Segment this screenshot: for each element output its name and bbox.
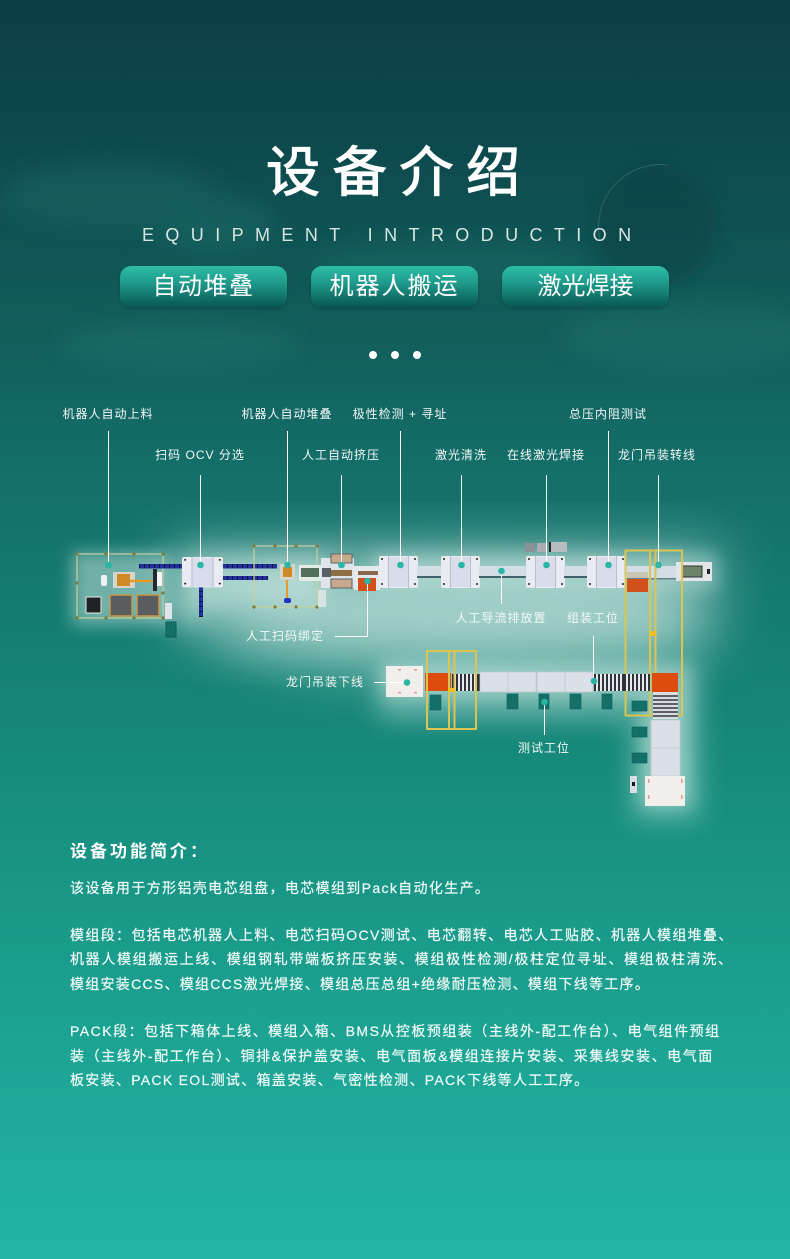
callout: total voltage resistance test: 总压内阻测试 (569, 406, 647, 421)
laser cleaning station (441, 556, 480, 588)
lower line roller (452, 674, 480, 691)
vertical white segments (651, 720, 680, 776)
module section paragraph: 模组安装CCS、模组CCS激光焊接、模组总压总组+绝缘耐压检测、模组下线等工序。 (70, 976, 650, 992)
module section paragraph (70, 927, 734, 992)
button: robot transfer: 机器人搬运 (330, 273, 460, 300)
polarity check station (379, 556, 418, 588)
callout: online laser welding (507, 447, 585, 568)
callout: polarity check and addressing: 极性检测 + 寻址 (353, 406, 447, 421)
button: automatic stacking: 自动堆叠 (152, 273, 254, 300)
callout: test station: 测试工位 (518, 740, 570, 755)
vertical roller (653, 692, 678, 719)
callout: total voltage resistance test (569, 406, 647, 568)
laser welder units (525, 542, 567, 552)
online laser welding station (526, 556, 565, 588)
callout: manual scan binding (246, 578, 371, 643)
extrusion station (299, 554, 354, 588)
lower line white block (386, 666, 423, 697)
callout: manual busbar placing: 人工导流排放置 (455, 610, 547, 625)
small console (630, 776, 637, 793)
blue conveyors (139, 564, 277, 617)
lower line orange carrier (425, 673, 451, 691)
button: robot transfer (311, 266, 478, 308)
module section paragraph: 模组段：包括电芯机器人上料、电芯扫码OCV测试、电芯翻转、电芯人工贴胶、机器人模组堆叠、 (70, 927, 734, 943)
total voltage test station (587, 556, 626, 588)
callout: laser cleaning (435, 448, 487, 568)
connecting conveyor (564, 566, 588, 578)
callout: assembly station (567, 610, 619, 684)
cell feeding robot cell (75, 552, 176, 637)
callout: scan OCV sorting (155, 448, 245, 568)
callout: gantry transfer: 龙门吊装转线 (618, 447, 696, 462)
stacking robot cell (252, 544, 326, 609)
pack section paragraph: 板安装、PACK EOL测试、箱盖安装、气密性检测、PACK下线等人工工序。 (70, 1072, 589, 1088)
callout: polarity check and addressing (353, 406, 447, 568)
busbar placing conveyor (479, 566, 526, 578)
callout: test station (518, 699, 570, 755)
button: laser welding (502, 266, 669, 308)
callout: online laser welding: 在线激光焊接 (507, 447, 585, 462)
pack section paragraph: PACK段：包括下箱体上线、模组入箱、BMS从控板预组装（主线外-配工作台）、电气组件预组 (70, 1023, 721, 1039)
pagination dots (369, 351, 421, 359)
button: automatic stacking (120, 266, 287, 308)
pack section paragraph (70, 1023, 721, 1088)
assembly white segments (480, 672, 593, 692)
callout: gantry transfer (618, 447, 696, 568)
module section paragraph: 机器人模组搬运上线、模组钢轧带端板挤压安装、模组极性检测/极柱定位寻址、模组极柱清洗、 (70, 951, 734, 967)
button: laser welding: 激光焊接 (538, 273, 634, 300)
upper conveyor and end unit (626, 562, 712, 592)
callout: gantry unloading: 龙门吊装下线 (286, 674, 364, 689)
callout: gantry unloading (286, 674, 410, 689)
intro paragraph: 该设备用于方形铝壳电芯组盘，电芯模组到Pack自动化生产。 (70, 880, 490, 896)
callout: robot auto stacking: 机器人自动堆叠 (241, 407, 333, 421)
scan OCV station (182, 557, 223, 587)
corner orange carrier (652, 673, 678, 692)
callout: robot auto stacking (241, 407, 333, 568)
callout: scan OCV sorting: 扫码 OCV 分选 (155, 448, 245, 462)
manual scan binding station (354, 566, 380, 591)
test stations (430, 694, 647, 763)
callout: robot auto feeding: 机器人自动上料 (62, 407, 154, 421)
english subtitle: EQUIPMENT INTRODUCTION (142, 225, 642, 245)
callout: laser cleaning: 激光清洗 (435, 448, 487, 462)
lower gantry (427, 651, 476, 729)
callout: manual busbar placing (455, 568, 547, 625)
callout: manual auto extrusion: 人工自动挤压 (302, 447, 380, 462)
bottom white block (645, 776, 685, 806)
upper gantry (626, 550, 682, 716)
connecting conveyor (417, 566, 441, 578)
section heading: 设备功能简介： (70, 842, 210, 861)
title: 设备介绍 (266, 143, 533, 203)
callout: manual auto extrusion (302, 447, 380, 568)
callout: assembly station: 组装工位 (567, 610, 619, 625)
callout: manual scan binding: 人工扫码绑定 (246, 628, 324, 643)
callout: robot auto feeding (62, 407, 154, 568)
machine glow (72, 548, 720, 820)
assembly roller (594, 674, 650, 691)
pack section paragraph: 装（主线外-配工作台）、铜排&保护盖安装、电气面板&模组连接片安装、采集线安装、电气面 (70, 1048, 714, 1064)
